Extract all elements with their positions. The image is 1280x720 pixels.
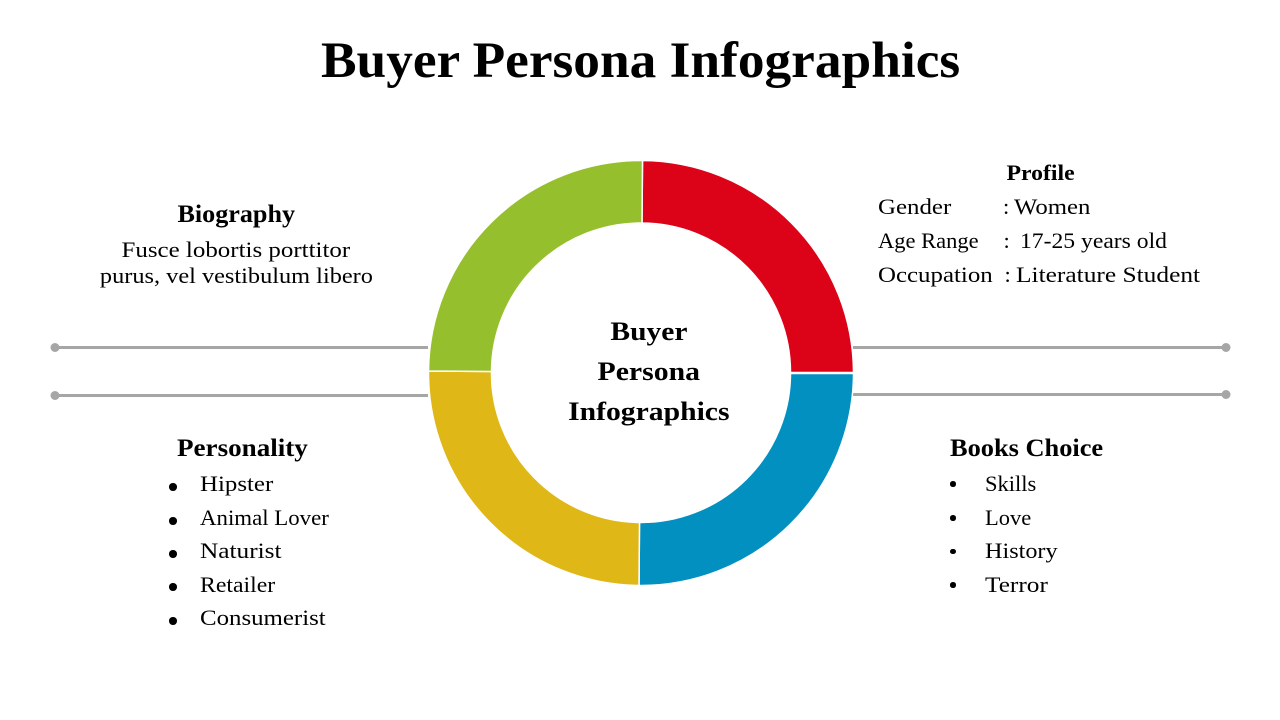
profile: gender (878, 194, 1090, 219)
panel: profile (878, 160, 1200, 287)
center label: Infographics (568, 397, 730, 426)
panel: books choice (950, 435, 1103, 597)
profile: age range: Age Range (878, 228, 979, 253)
title: Buyer Persona Infographics (321, 33, 960, 89)
center label (568, 317, 730, 426)
profile: age range (878, 228, 1167, 253)
books list: Skills (985, 471, 1036, 496)
biography text: Fusce lobortis porttitor (122, 237, 350, 262)
donut segment: red (642, 160, 854, 372)
panel: biography (99, 201, 373, 288)
profile: age range: : (1004, 228, 1010, 253)
biography text (99, 237, 373, 288)
heading: profile: Profile (1007, 160, 1075, 185)
donut segment: green (428, 160, 642, 372)
personality list: Naturist (200, 538, 282, 563)
connector: personality (50, 391, 428, 400)
personality list: Animal Lover (200, 505, 329, 530)
biography text: purus, vel vestibulum libero (99, 263, 373, 288)
connector: biography (50, 343, 428, 352)
books list: History (985, 538, 1058, 563)
center label: Buyer (610, 317, 688, 346)
personality list: Retailer (200, 572, 275, 597)
books list (950, 471, 1058, 597)
personality list (169, 471, 329, 630)
connector: profile (853, 343, 1230, 352)
heading: personality: Personality (177, 435, 308, 462)
connector: books choice (853, 390, 1230, 399)
profile: occupation: Literature Student (1016, 262, 1200, 287)
profile: occupation: : (1004, 262, 1011, 287)
profile: gender: : (1003, 194, 1009, 219)
books list: Love (985, 505, 1031, 530)
center label: Persona (598, 357, 700, 386)
personality list: Hipster (200, 471, 273, 496)
heading: books choice: Books Choice (950, 435, 1103, 462)
heading: biography: Biography (177, 201, 295, 228)
profile: gender: Women (1014, 194, 1090, 219)
profile: occupation (878, 262, 1200, 287)
donut segment: blue (639, 374, 854, 586)
profile: gender: Gender (878, 194, 951, 219)
personality list: Consumerist (200, 605, 326, 630)
profile: occupation: Occupation (878, 262, 993, 287)
panel: personality (169, 435, 329, 630)
profile: age range: 17-25 years old (1020, 228, 1166, 253)
donut segment: yellow (428, 371, 640, 586)
books list: Terror (985, 572, 1048, 597)
